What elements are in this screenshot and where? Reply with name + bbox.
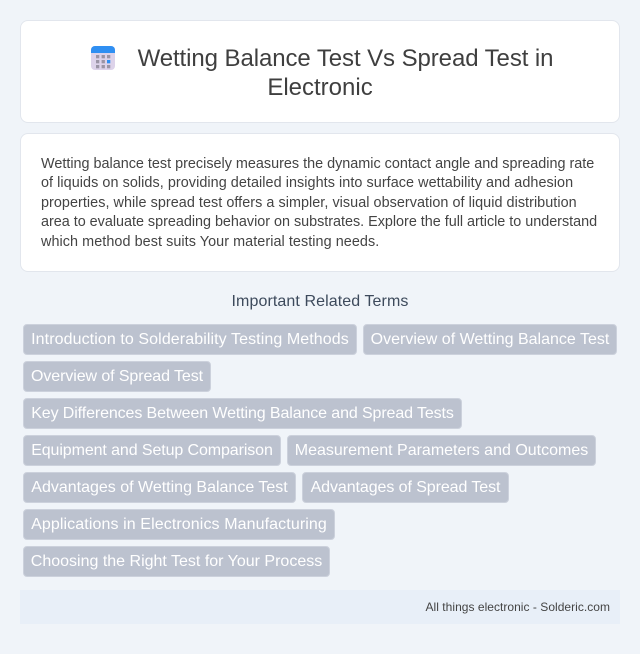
related terms tags: Advantages of Spread Test xyxy=(311,479,500,496)
summary text: Wetting balance test precisely measures the dynamic contact angle and spreading rate xyxy=(41,156,594,172)
summary text: properties, while spread test offers a simpler, visual observation of liquid distribution xyxy=(41,195,577,211)
related terms heading: Important Related Terms xyxy=(232,293,408,310)
summary text xyxy=(41,156,597,250)
summary text: area to evaluate spreading behavior on substrates. Explore the full article to understand xyxy=(41,214,597,230)
title xyxy=(138,45,553,101)
footer bar: All things electronic - Solderic.com xyxy=(426,600,610,614)
related terms tags: Key Differences Between Wetting Balance and Spread Tests xyxy=(31,405,454,422)
title: Wetting Balance Test Vs Spread Test in xyxy=(138,45,553,72)
icon: calendar xyxy=(91,46,115,70)
related terms tags: Introduction to Solderability Testing Methods xyxy=(31,331,349,348)
related terms tags: Overview of Spread Test xyxy=(31,368,203,385)
summary text: which method best suits Your material testing needs. xyxy=(41,234,379,250)
related terms tags xyxy=(23,324,617,577)
related terms tags: Equipment and Setup Comparison xyxy=(31,442,273,459)
related terms tags: Overview of Wetting Balance Test xyxy=(371,331,609,348)
summary panel xyxy=(20,133,620,272)
related terms tags: Applications in Electronics Manufacturing xyxy=(31,516,327,533)
title: Electronic xyxy=(267,74,373,101)
related terms tags: Choosing the Right Test for Your Process xyxy=(31,553,322,570)
footer bar xyxy=(20,590,620,624)
header card xyxy=(20,20,620,123)
related terms tags: Advantages of Wetting Balance Test xyxy=(31,479,288,496)
related terms tags: Measurement Parameters and Outcomes xyxy=(295,442,588,459)
summary text: of liquids on solids, providing detailed insights into surface wettability and adhesion xyxy=(41,175,573,191)
